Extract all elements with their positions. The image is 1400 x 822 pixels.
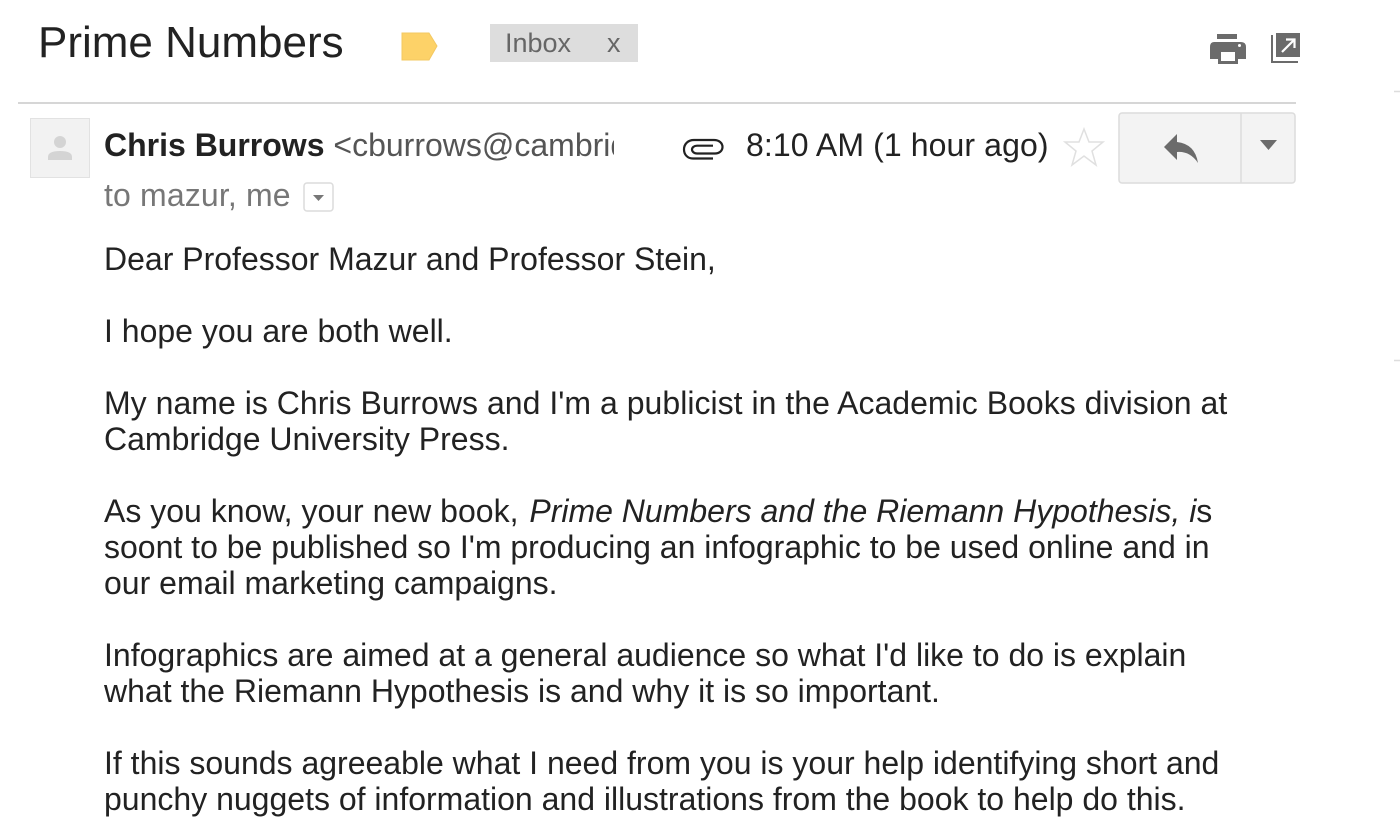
paragraph: request: punchy nuggets of information and illustrations from the book to help do this. — [104, 781, 1186, 817]
paragraph: introduction: My name is Chris Burrows and I'm a publicist in the Academic Books division at — [104, 385, 1227, 421]
paragraph: request: If this sounds agreeable what I need from you is your help identifying short and — [104, 745, 1219, 781]
paragraph: hope: I hope you are both well. — [104, 313, 453, 349]
paragraph: introduction — [104, 385, 1228, 457]
paragraph: book: As you know, your new book, Prime Numbers and the Riemann Hypothesis, is — [104, 493, 1212, 529]
avatar placeholder — [30, 118, 90, 178]
paragraph: book — [104, 493, 1212, 601]
inbox remove x: x — [607, 28, 620, 58]
paragraph: infographics: Infographics are aimed at a general audience so what I'd like to do is explain — [104, 637, 1186, 673]
paragraph: infographics — [104, 637, 1186, 709]
greeting: Dear Professor Mazur and Professor Stein, — [104, 241, 716, 277]
timestamp: 8:10 AM (1 hour ago) — [746, 127, 1049, 163]
right edge tick marks — [1394, 90, 1400, 362]
paragraph: introduction: Cambridge University Press. — [104, 421, 509, 457]
icon: recipients dropdown — [303, 182, 334, 212]
title: Prime Numbers — [38, 18, 344, 67]
header divider — [18, 102, 1296, 104]
paragraph: book: soont to be published so I'm producing an infographic to be used online and in — [104, 529, 1210, 565]
icon: attachment paperclip — [682, 138, 724, 160]
icon: yellow label tag — [402, 32, 438, 60]
paragraph: book: our email marketing campaigns. — [104, 565, 558, 601]
icon: open in new window — [1271, 33, 1300, 63]
recipients line: to mazur, me — [104, 177, 291, 213]
icon: star — [1063, 127, 1105, 167]
inbox label chip — [490, 24, 638, 62]
paragraph: infographics: what the Riemann Hypothesis is and why it is so important. — [104, 673, 940, 709]
paragraph: request — [104, 745, 1219, 817]
reply button — [1118, 112, 1296, 184]
icon: printer — [1210, 34, 1246, 64]
inbox label text: Inbox — [505, 28, 571, 58]
email body — [104, 241, 1228, 817]
